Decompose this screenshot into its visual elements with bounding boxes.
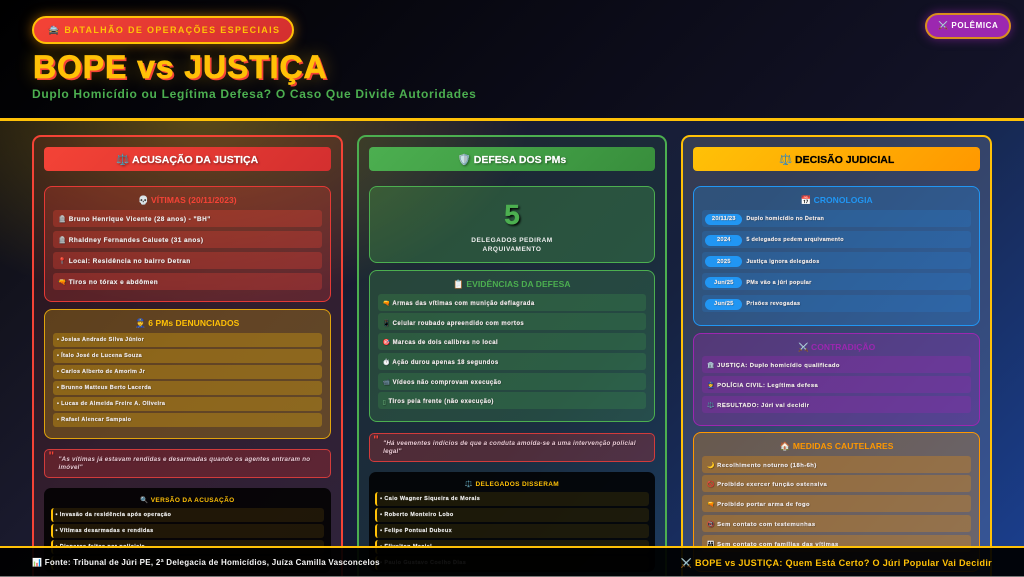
box: cronologia: Jun/25 — [714, 301, 734, 307]
footer source: 📊 Fonte: Tribunal de Júri PE, 2ª Delegacia de Homicídios, Juíza Camilla Vasconcelos — [32, 558, 380, 567]
box: delegados disseram: • Roberto Monteiro Lobo — [380, 512, 454, 518]
box: versão da acusação: • Invasão da residência após operação — [56, 512, 171, 518]
box: medidas cautelares: 🔫 Proibido portar arma de fogo — [707, 502, 810, 508]
box: PMs denunciados: • Josias Andrade Silva Júnior — [57, 337, 144, 343]
box: cronologia: 📅 CRONOLOGIA — [801, 195, 873, 205]
box: cronologia: PMs vão a júri popular — [746, 280, 812, 286]
box: vítimas — [44, 186, 331, 302]
box: cronologia: 20/11/23 — [712, 216, 736, 222]
box: PMs denunciados — [44, 309, 331, 438]
box: delegados disseram: • Paulo Gustavo Coelho Dias — [380, 560, 466, 566]
badge: batalhão: 🚔 BATALHÃO DE OPERAÇÕES ESPECIAIS — [48, 25, 280, 35]
title: BOPE vs JUSTIÇA — [33, 49, 327, 85]
box: contradição — [693, 332, 980, 426]
box: versão da acusação: • Vítimas desarmadas e rendidas — [56, 528, 154, 534]
quote: intervenção policial legal: "Há veementes indícios de que a conduta amolda-se a uma intervenção policial legal" — [383, 440, 636, 454]
box: evidências da defesa: 📹 Vídeos não comprovam execução — [383, 380, 502, 386]
box: versão da acusação — [44, 488, 331, 573]
box: contradição: 🏛️ JUSTIÇA: Duplo homicídio qualificado — [707, 363, 840, 369]
box: delegados disseram: ⚖️ DELEGADOS DISSERAM — [465, 480, 559, 488]
box: cronologia — [693, 186, 980, 326]
box: vítimas: 🪦 Rhaldney Fernandes Caluete (31 anos) — [58, 237, 203, 244]
box: evidências da defesa: ⏱️ Ação durou apenas 18 segundos — [383, 360, 499, 366]
box: versão da acusação: 🔍 VERSÃO DA ACUSAÇÃO — [140, 496, 235, 504]
box: delegados disseram: • Felipe Pontual Dubeux — [380, 528, 452, 534]
box: cronologia: 2024 — [717, 237, 731, 243]
stat: 5 delegados: DELEGADOS PEDIRAM — [471, 237, 553, 244]
box: medidas cautelares — [693, 432, 980, 572]
subtitle: Duplo Homicídio ou Legítima Defesa? O Caso Que Divide Autoridades — [32, 87, 476, 101]
box: medidas cautelares: 🚫 Proibido exercer função ostensiva — [707, 482, 827, 488]
panel: acusação da justiça — [32, 135, 343, 577]
box: PMs denunciados: • Rafael Alencar Sampaio — [57, 417, 131, 423]
box: vítimas: 🔫 Tiros no tórax e abdômen — [58, 279, 158, 286]
box: vítimas: 💀 VÍTIMAS (20/11/2023) — [138, 195, 237, 205]
badge: batalhão — [32, 16, 294, 44]
tag: polêmica — [925, 13, 1011, 39]
quote: intervenção policial legal: " — [373, 433, 379, 447]
box: vítimas: 🪦 Bruno Henrique Vicente (28 anos) - "BH" — [58, 216, 211, 223]
footer — [0, 546, 1024, 577]
footer headline: ⚔️ BOPE vs JUSTIÇA: Quem Está Certo? O Júri Popular Vai Decidir — [681, 558, 992, 568]
box: PMs denunciados: • Carlos Alberto de Amorim Jr — [57, 369, 145, 375]
header — [0, 0, 1024, 121]
box: versão da acusação: • Disparos feitos por policiais — [56, 544, 145, 550]
box: cronologia: Justiça ignora delegados — [746, 259, 820, 265]
box: contradição: ⚖️ RESULTADO: Júri vai decidir — [707, 403, 809, 409]
box: medidas cautelares: 🌙 Recolhimento noturno (18h-6h) — [707, 462, 817, 468]
box: contradição: ⚔️ CONTRADIÇÃO — [798, 342, 875, 352]
box: evidências da defesa: 🔫 Armas das vítimas com munição deflagrada — [383, 301, 535, 307]
box: delegados disseram: • Elivelton Maciel — [380, 544, 432, 550]
box: PMs denunciados: • Brunno Matteus Berto Lacerda — [57, 385, 151, 391]
stat: 5 delegados: 5 — [504, 199, 520, 230]
box: delegados disseram: • Caio Wagner Siqueira de Morais — [380, 496, 480, 502]
box: vítimas: 📍 Local: Residência no bairro Detran — [58, 258, 191, 265]
stat: 5 delegados: ARQUIVAMENTO — [483, 246, 541, 253]
panel heading: acusação — [44, 147, 331, 171]
box: medidas cautelares: 📵 Sem contato com testemunhas — [707, 522, 816, 528]
panel heading: defesa — [369, 147, 655, 171]
box: evidências da defesa: Tiros pela frente (não execução) — [388, 399, 494, 405]
box: medidas cautelares: 👨‍👩‍👧 Sem contato com famílias das vítimas — [707, 542, 839, 548]
box: evidências da defesa: 📋 EVIDÊNCIAS DA DEFESA — [453, 279, 571, 289]
box: versão da acusação: • Cena alterada pelos policiais — [56, 560, 147, 566]
box: cronologia: Duplo homicídio no Detran — [746, 216, 824, 222]
box: cronologia: 5 delegados pedem arquivamento — [746, 237, 844, 243]
box: evidências da defesa: 🎯 Marcas de dois calibres no local — [383, 340, 498, 346]
stat: 5 delegados — [369, 186, 655, 263]
box: PMs denunciados: 👮 6 PMs DENUNCIADOS — [135, 318, 239, 328]
panel: decisão judicial — [681, 135, 992, 577]
box: evidências da defesa — [369, 270, 655, 422]
panel: defesa dos PMs — [357, 135, 667, 577]
box: evidências da defesa: ▯ — [383, 400, 386, 406]
panel heading: defesa: 🛡️ DEFESA DOS PMs — [458, 154, 566, 166]
box: contradição: 👮 POLÍCIA CIVIL: Legítima defesa — [707, 383, 818, 389]
panel heading: decisão — [693, 147, 980, 171]
tag: polêmica: ⚔️ POLÊMICA — [938, 21, 998, 30]
panel heading: decisão: ⚖️ DECISÃO JUDICIAL — [779, 154, 894, 166]
box: cronologia: 2025 — [717, 259, 731, 265]
box: PMs denunciados: • Ítalo José de Lucena Souza — [57, 353, 142, 359]
box: evidências da defesa: 📱 Celular roubado apreendido com mortos — [383, 321, 524, 327]
quote: vítimas rendidas: " — [48, 449, 54, 463]
panel heading: acusação: ⚖️ ACUSAÇÃO DA JUSTIÇA — [116, 154, 258, 166]
box: delegados disseram — [369, 472, 655, 572]
box: cronologia: Prisões revogadas — [746, 301, 800, 307]
box: medidas cautelares: 🏠 MEDIDAS CAUTELARES — [780, 441, 893, 451]
quote: intervenção policial legal — [369, 433, 655, 462]
quote: vítimas rendidas — [44, 449, 331, 478]
box: cronologia: Jun/25 — [714, 280, 734, 286]
box: PMs denunciados: • Lucas de Almeida Freire A. Oliveira — [57, 401, 165, 407]
quote: vítimas rendidas: "As vítimas já estavam rendidas e desarmadas quando os agentes entraram no imóvel" — [58, 456, 310, 470]
